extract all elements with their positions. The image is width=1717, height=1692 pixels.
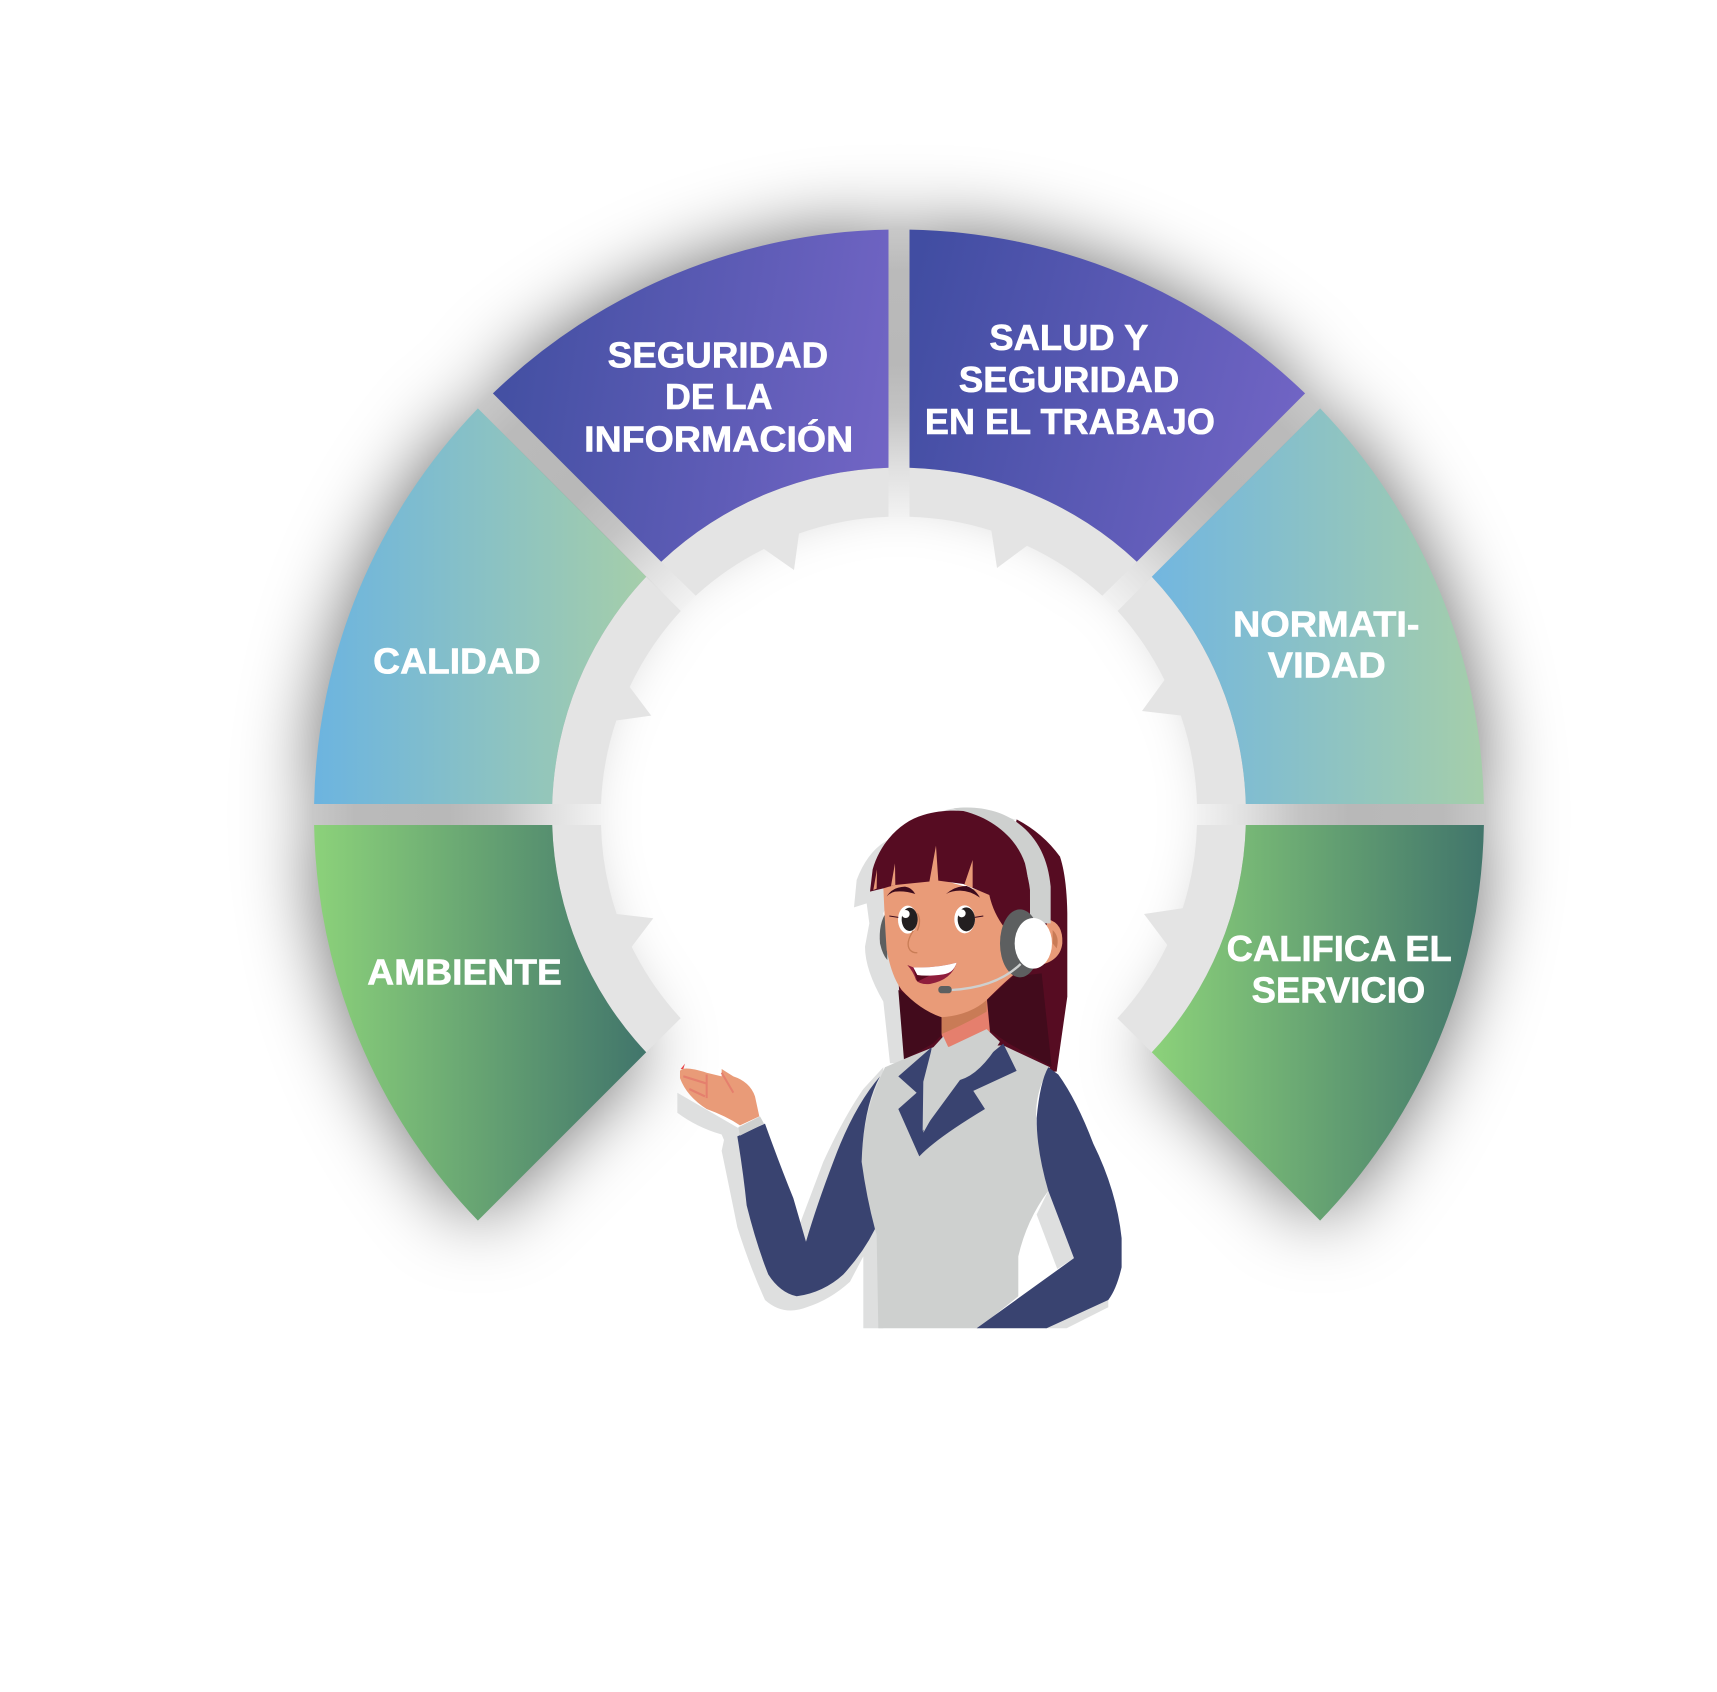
segment: Salud y seguridad en el trabajo <box>910 230 1305 562</box>
segment: Seguridad de la información <box>493 230 888 562</box>
segment: Califica el servicio: SERVICIO <box>1252 969 1425 1010</box>
segment: Salud y seguridad en el trabajo: SALUD Y <box>989 317 1148 358</box>
gaps between the wheel segments <box>314 230 1484 825</box>
segment: Normatividad <box>1152 408 1484 804</box>
segment: Salud y seguridad en el trabajo: EN EL TRABAJO <box>925 401 1215 442</box>
soft drop shadow of the wheel <box>314 230 1484 1221</box>
segment: Normatividad: NORMATI- <box>1233 604 1420 645</box>
inner grey toothed ring <box>552 468 1246 1052</box>
segment: Ambiente: AMBIENTE <box>367 952 562 993</box>
segment: Seguridad de la información: INFORMACIÓN <box>584 417 853 459</box>
character: call-centre agent with headset <box>677 807 1122 1328</box>
segment: Seguridad de la información: SEGURIDAD <box>608 334 828 375</box>
segment: Ambiente <box>314 825 646 1221</box>
segment: Normatividad: VIDAD <box>1268 645 1386 686</box>
segment: Salud y seguridad en el trabajo: SEGURIDAD <box>959 359 1179 400</box>
segment: Calidad: CALIDAD <box>373 641 541 682</box>
segment: Seguridad de la información: DE LA <box>665 376 773 417</box>
segment: Califica el servicio: CALIFICA EL <box>1227 928 1452 969</box>
segment: Califica el servicio <box>1152 825 1484 1221</box>
segment: Calidad <box>314 408 646 804</box>
